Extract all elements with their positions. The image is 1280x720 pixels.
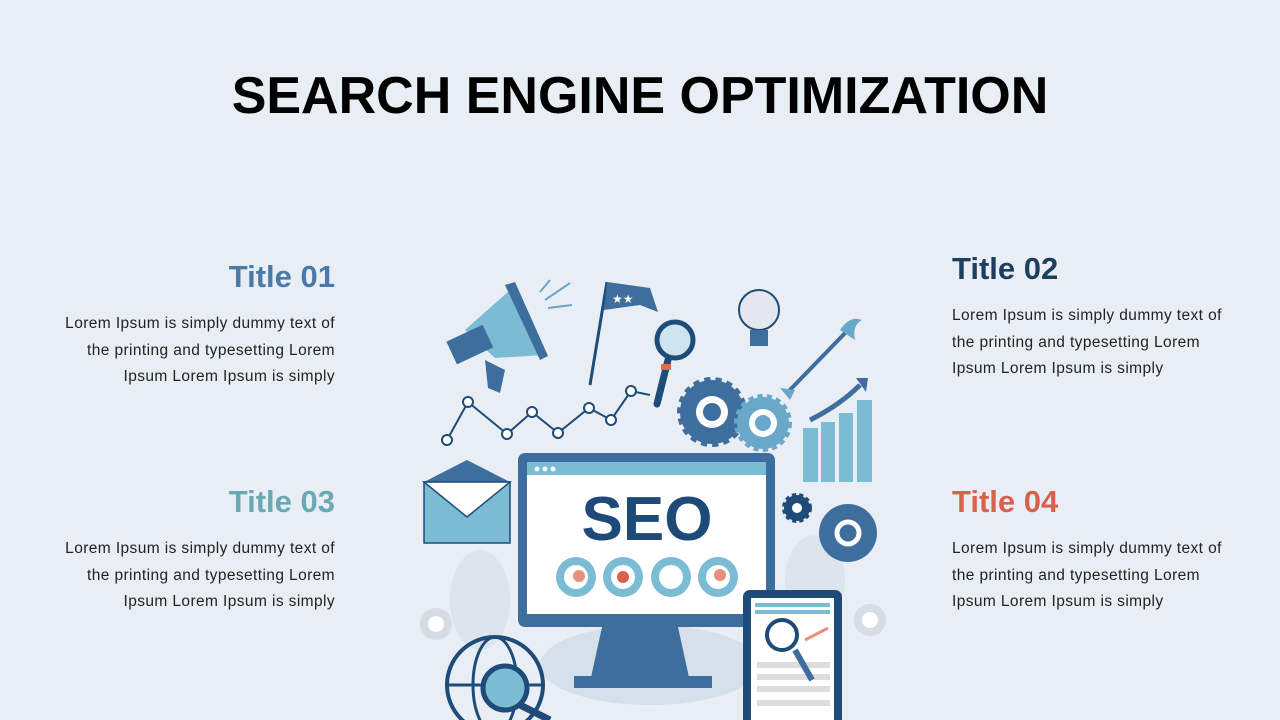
icon: tablet — [743, 590, 842, 720]
text block 03: Lorem Ipsum is simply dummy text of — [65, 540, 335, 557]
text block 02 — [952, 307, 1222, 377]
text block 04 — [952, 540, 1222, 610]
text block 03 — [65, 540, 335, 610]
text block 03: the printing and typesetting Lorem — [87, 566, 335, 584]
icon: flag: ★★ — [612, 292, 634, 306]
heading: Title 03: Title 03 — [229, 484, 335, 519]
text block 03: Ipsum Lorem Ipsum is simply — [124, 593, 335, 610]
text block 02: the printing and typesetting Lorem — [952, 334, 1200, 350]
icon: arrow — [780, 319, 862, 400]
icon: faint gears — [420, 604, 886, 640]
icon: bulb — [739, 290, 779, 346]
text block 01: Ipsum Lorem Ipsum is simply — [124, 368, 335, 385]
icon: globe with magnifier — [447, 637, 550, 720]
heading: Title 02: Title 02 — [952, 251, 1058, 286]
text block 04: the printing and typesetting Lorem — [952, 566, 1200, 584]
text block 01: the printing and typesetting Lorem — [87, 342, 335, 358]
title: SEARCH ENGINE OPTIMIZATION — [232, 67, 1048, 125]
icon: gears — [680, 380, 789, 449]
heading: Title 01: Title 01 — [229, 259, 335, 294]
icon: magnifier — [657, 322, 693, 404]
SEO text: SEO — [582, 485, 712, 554]
text block 04: Lorem Ipsum is simply dummy text of — [952, 540, 1222, 557]
chart: line — [442, 386, 650, 445]
icon: flag — [590, 282, 658, 385]
text block 01 — [65, 315, 335, 385]
chart: bars — [803, 378, 872, 482]
text block 04: Ipsum Lorem Ipsum is simply — [952, 593, 1164, 610]
text block 01: Lorem Ipsum is simply dummy text of — [65, 315, 335, 332]
icon: megaphone — [446, 280, 572, 393]
heading: Title 04: Title 04 — [952, 484, 1058, 519]
monitor — [518, 453, 775, 688]
icon: background cloud — [450, 535, 845, 705]
icon: envelope — [424, 460, 510, 543]
text block 02: Ipsum Lorem Ipsum is simply — [952, 360, 1164, 377]
text block 02: Lorem Ipsum is simply dummy text of — [952, 307, 1222, 324]
icon: small gear and chat circle — [784, 495, 877, 562]
